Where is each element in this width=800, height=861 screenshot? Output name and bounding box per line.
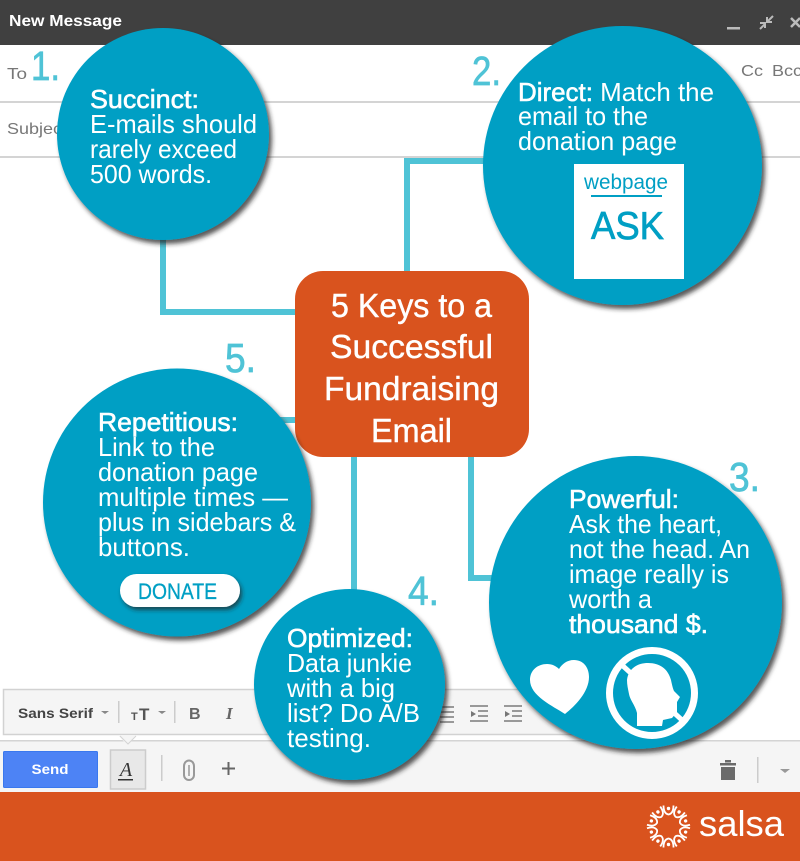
panel: key 5 repetitious: donation page — [98, 457, 258, 487]
panel: key 3 powerful: thousand $. — [569, 609, 708, 639]
number 1: 1. — [31, 43, 60, 89]
icon: webpage ask: ASK — [591, 205, 664, 248]
send button: Send — [32, 761, 68, 777]
panel: key 4 optimized: list? Do A/B — [287, 698, 420, 728]
panel: key 1 succinct — [57, 28, 269, 240]
panel: key 3 powerful: worth a — [568, 584, 653, 614]
formatting toolbar: I — [225, 704, 234, 723]
panel: key 5 repetitious: plus in sidebars & — [98, 507, 296, 537]
icon: no head — [610, 650, 694, 736]
panel: key 1 succinct: rarely exceed — [90, 134, 237, 164]
panel: key 5 repetitious: Repetitious: — [98, 407, 238, 437]
panel: key 1 succinct: 500 words. — [90, 159, 212, 189]
panel: key 3 powerful: Powerful: — [569, 484, 679, 514]
panel: key 5 repetitious: multiple times — — [98, 482, 288, 512]
connector lines — [163, 161, 500, 595]
footer band — [0, 792, 800, 861]
panel: key 2 direct — [483, 26, 762, 305]
salsa logo — [647, 803, 785, 848]
panel: key 4 optimized: Data junkie — [287, 648, 412, 678]
panel: key 4 optimized: Optimized: — [287, 623, 413, 653]
panel: key 4 optimized: testing. — [287, 723, 371, 753]
panel: key 3 powerful: image really is — [569, 559, 729, 589]
panel: key 4 optimized: with a big — [286, 673, 395, 703]
formatting toolbar: T — [139, 705, 150, 724]
icon: webpage ask: webpage — [583, 171, 668, 194]
email address fields: Cc — [741, 63, 763, 80]
icon: paperclip — [184, 760, 194, 780]
central title box: Email — [371, 412, 452, 449]
icon: trash — [720, 760, 736, 780]
number 3: 3. — [729, 454, 760, 500]
icon: plus — [222, 762, 235, 775]
send button — [4, 752, 98, 788]
icon: heart — [530, 660, 589, 714]
number 5: 5. — [225, 335, 256, 381]
donate button — [120, 574, 240, 607]
panel: key 2 direct: donation page — [518, 126, 677, 156]
bottom action bar — [0, 736, 800, 792]
email address fields — [0, 63, 800, 158]
email window title bar: New Message — [9, 13, 122, 30]
formatting toolbar: Sans Serif — [18, 705, 93, 721]
central title box: Fundraising — [324, 370, 499, 407]
salsa logo: salsa — [699, 803, 785, 844]
panel: key 1 succinct: E-mails should — [90, 109, 257, 139]
central title box — [295, 271, 529, 457]
donate button: DONATE — [138, 579, 217, 604]
email address fields: Bcc — [772, 63, 800, 80]
formatting toolbar — [4, 690, 604, 734]
panel: key 2 direct: Direct: Match the — [518, 77, 714, 107]
formatting toolbar: B — [189, 706, 201, 723]
icon: webpage ask — [574, 164, 684, 279]
central title box: 5 Keys to a — [331, 287, 493, 324]
panel: key 2 direct: email to the — [518, 101, 648, 131]
email address fields: To — [7, 66, 27, 83]
panel: key 3 powerful: Ask the heart, — [569, 509, 722, 539]
text format button: A — [118, 759, 133, 781]
central title box: Successful — [330, 328, 493, 365]
panel: key 3 powerful: not the head. An — [569, 534, 750, 564]
text format button — [110, 750, 146, 789]
panel: key 4 optimized — [254, 589, 445, 780]
panel: key 5 repetitious: Link to the — [98, 432, 215, 462]
number 2: 2. — [472, 48, 501, 94]
number 4: 4. — [408, 568, 439, 614]
panel: key 1 succinct: Succinct: — [90, 84, 199, 114]
panel: key 5 repetitious — [43, 368, 311, 636]
panel: key 5 repetitious: buttons. — [98, 532, 190, 562]
formatting toolbar: T — [131, 711, 138, 723]
email address fields: Subject — [7, 121, 68, 138]
panel: key 3 powerful — [489, 456, 782, 749]
email window title bar — [0, 0, 800, 45]
